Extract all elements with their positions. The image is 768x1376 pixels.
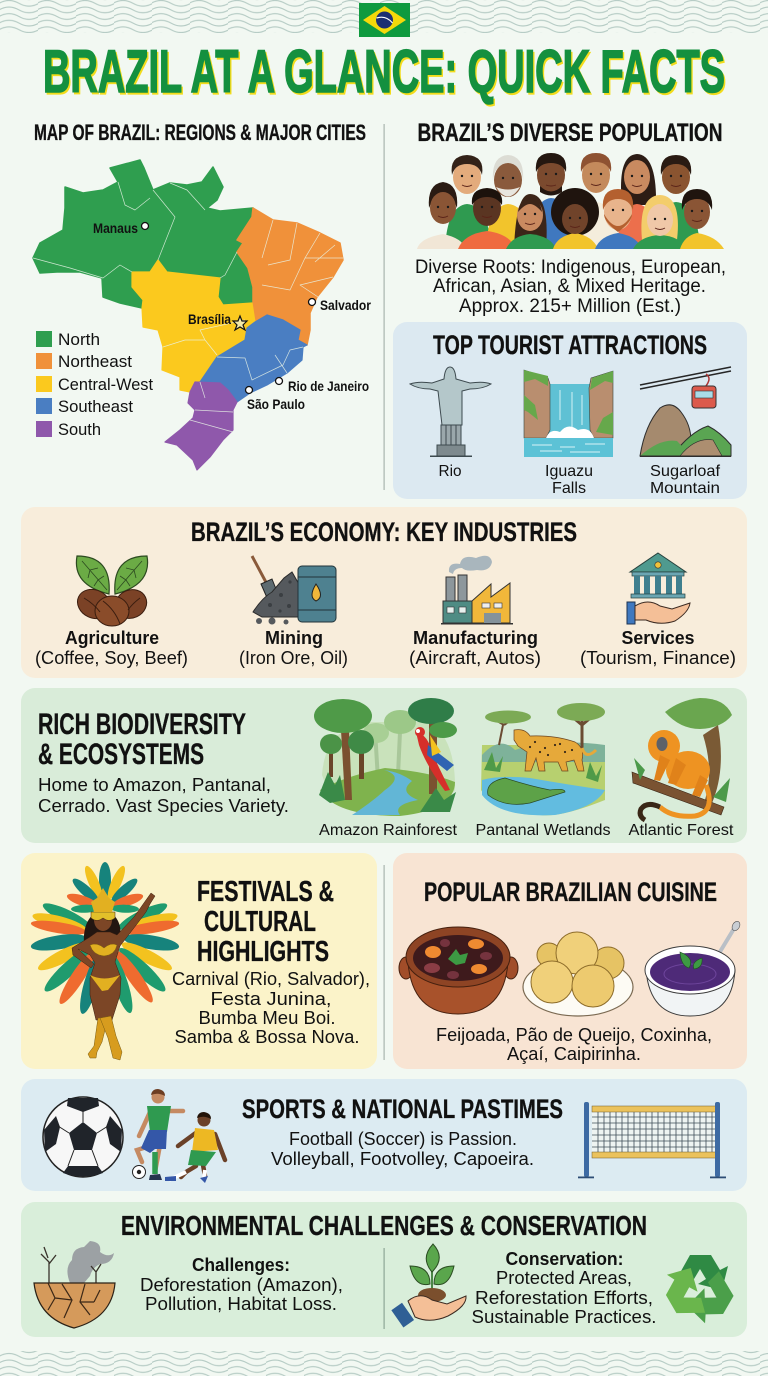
label: agriculture: (Coffee, Soy, Beef)	[35, 648, 188, 668]
illustration: carnival dancer	[30, 862, 180, 1060]
city: Sao Paulo: São Paulo	[247, 396, 305, 412]
text: sports description: Volleyball, Footvolley, Capoeira.	[271, 1149, 534, 1169]
label: manufacturing: (Aircraft, Autos)	[409, 648, 541, 668]
icon: cracked earth with smoke	[34, 1241, 115, 1328]
illustration: Atlantic Forest	[632, 698, 732, 820]
label: manufacturing	[409, 628, 541, 668]
text: challenges	[140, 1255, 343, 1314]
map legend: Southeast	[58, 397, 133, 416]
map legend: North	[58, 330, 100, 349]
heading: economy: BRAZIL’S ECONOMY: KEY INDUSTRIES	[191, 517, 577, 547]
top wave band	[0, 0, 768, 33]
region: Southeast	[200, 315, 307, 402]
panel: economy key industries	[21, 507, 747, 678]
map legend: Northeast	[58, 352, 132, 371]
heading: sports: SPORTS & NATIONAL PASTIMES	[242, 1094, 563, 1124]
heading: festivals: FESTIVALS &	[197, 876, 334, 908]
label: mining: (Iron Ore, Oil)	[239, 648, 348, 668]
text: biodiversity description	[38, 775, 289, 816]
icon: football players	[132, 1089, 225, 1183]
icon: soccer ball	[43, 1097, 123, 1177]
region: Central-West	[132, 260, 255, 392]
label: manufacturing: Manufacturing	[413, 628, 538, 648]
text: conservation	[472, 1249, 656, 1327]
panel: top tourist attractions	[393, 322, 747, 499]
label: mining	[239, 628, 348, 668]
icon: Brazilian flag	[359, 3, 410, 37]
text: challenges: Pollution, Habitat Loss.	[145, 1294, 337, 1314]
label: Iguazu Falls	[545, 463, 593, 497]
heading: festivals: HIGHLIGHTS	[197, 936, 329, 968]
label: mining: Mining	[265, 628, 323, 648]
icon: volleyball net	[578, 1102, 726, 1178]
icon: Sugarloaf Mountain	[640, 367, 731, 457]
label: Sugarloaf Mountain	[650, 463, 721, 497]
text: biodiversity description: Cerrado. Vast Species Variety.	[38, 796, 289, 816]
heading: biodiversity	[38, 708, 246, 771]
panel: sports	[21, 1079, 747, 1191]
text: population description: African, Asian, & Mixed Heritage.	[433, 276, 706, 297]
text: population description: Diverse Roots: Indigenous, European,	[415, 257, 726, 278]
region: South	[165, 382, 237, 470]
illustration: acai bowl	[645, 920, 742, 1016]
map legend: Central-West	[58, 375, 153, 394]
label: Atlantic Forest: Atlantic Forest	[628, 822, 734, 839]
label: Iguazu Falls: Iguazu	[545, 463, 593, 480]
text: conservation: Protected Areas,	[496, 1268, 632, 1288]
icon: bank in open hand	[627, 553, 690, 624]
text: challenges: Challenges:	[192, 1255, 290, 1275]
icon: hand holding seedling	[391, 1244, 466, 1327]
text: cuisine description: Feijoada, Pão de Queijo, Coxinha,	[436, 1025, 712, 1045]
label: services	[580, 628, 736, 668]
text: population description	[415, 257, 726, 317]
panel: environmental challenges and conservation	[21, 1202, 747, 1337]
label: agriculture: Agriculture	[65, 628, 159, 648]
map regions	[33, 160, 343, 470]
map legend	[36, 330, 153, 439]
item: services	[580, 553, 736, 668]
text: festivals description: Carnival (Rio, Salvador),	[172, 969, 370, 989]
panel: cuisine	[393, 853, 747, 1069]
icon: factory	[441, 556, 513, 624]
icon: Christ the Redeemer	[410, 367, 491, 457]
text: population description: Approx. 215+ Million (Est.)	[459, 296, 681, 317]
label: Pantanal Wetlands: Pantanal Wetlands	[476, 822, 610, 839]
item: manufacturing	[409, 556, 541, 668]
label: Rio: Rio	[438, 463, 462, 480]
text: festivals description: Samba & Bossa Nova.	[174, 1027, 360, 1047]
city: Manaus: Manaus	[93, 220, 138, 236]
illustration: feijoada pot	[399, 927, 518, 1014]
heading: biodiversity: & ECOSYSTEMS	[38, 738, 204, 771]
heading: festivals: CULTURAL	[204, 906, 316, 938]
label: agriculture	[35, 628, 188, 668]
label: services: Services	[622, 628, 694, 648]
text: sports description	[271, 1129, 534, 1169]
text: challenges: Deforestation (Amazon),	[140, 1275, 343, 1295]
label: Sugarloaf Mountain: Mountain	[650, 480, 720, 497]
icon: recycling arrows	[657, 1255, 741, 1329]
illustration: Amazon Rainforest	[314, 698, 457, 816]
item: agriculture	[35, 556, 188, 668]
city: Rio de Janeiro: Rio de Janeiro	[288, 378, 369, 394]
region: Northeast	[237, 208, 343, 345]
text: sports description: Football (Soccer) is Passion.	[289, 1129, 517, 1149]
text: cuisine description	[436, 1025, 712, 1064]
panel: festivals	[21, 853, 377, 1069]
bottom wave band	[0, 1351, 768, 1376]
heading: festivals	[197, 876, 334, 968]
text: biodiversity description: Home to Amazon, Pantanal,	[38, 775, 271, 795]
panel: diverse population	[415, 119, 726, 317]
region: North	[33, 160, 253, 308]
city: Salvador: Salvador	[320, 297, 371, 313]
text: conservation: Reforestation Efforts,	[475, 1288, 653, 1308]
text: conservation: Conservation:	[506, 1249, 624, 1269]
icon: Iguazu Falls	[524, 370, 613, 457]
label: Iguazu Falls: Falls	[552, 480, 586, 497]
item: mining	[239, 556, 348, 668]
city: Brasilia: Brasília	[188, 311, 231, 327]
label: services: (Tourism, Finance)	[580, 648, 736, 668]
panel: biodiversity	[21, 688, 747, 843]
heading: map: MAP OF BRAZIL: REGIONS & MAJOR CITIES	[34, 120, 366, 145]
illustration: group of people	[417, 153, 724, 249]
label: Sugarloaf Mountain: Sugarloaf	[650, 463, 721, 480]
panel: map of Brazil	[33, 120, 371, 470]
text: festivals description: Bumba Meu Boi.	[198, 1008, 336, 1028]
text: cuisine description: Açaí, Caipirinha.	[507, 1044, 641, 1064]
label: Amazon Rainforest: Amazon Rainforest	[319, 822, 458, 839]
illustration: Pantanal Wetlands	[481, 703, 605, 815]
map legend: South	[58, 420, 101, 439]
city: Sao Paulo	[246, 386, 305, 412]
icon: coffee leaves and beans	[73, 556, 151, 626]
illustration: pao de queijo	[523, 932, 633, 1016]
heading: biodiversity: RICH BIODIVERSITY	[38, 708, 246, 741]
icon: ore pile and oil barrel	[252, 556, 336, 624]
text: festivals description	[172, 969, 370, 1047]
text: conservation: Sustainable Practices.	[472, 1307, 656, 1327]
text: festivals description: Festa Junina,	[210, 989, 332, 1009]
